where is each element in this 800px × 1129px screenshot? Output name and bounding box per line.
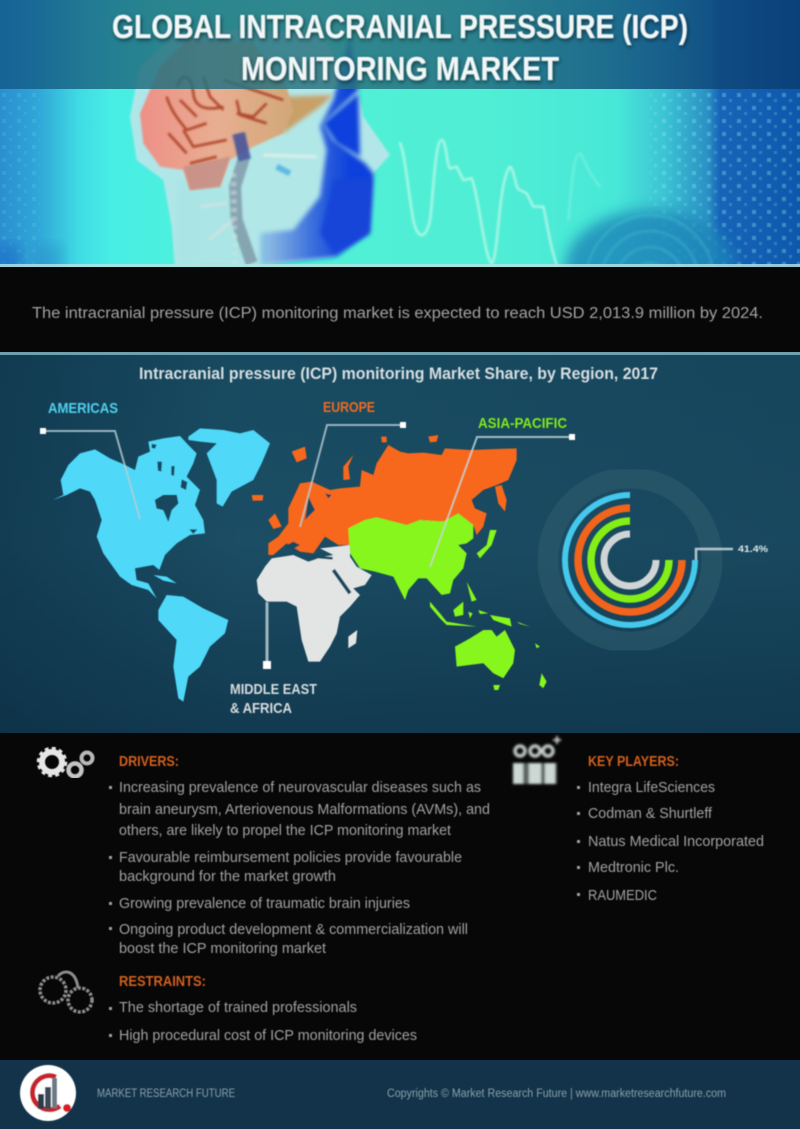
callout: Asia-Pacific <box>430 415 575 567</box>
list: drivers <box>109 780 490 957</box>
icon: gears <box>38 748 92 776</box>
panel: market share by region <box>0 352 800 733</box>
list: drivers: Increasing prevalence of neurovascular diseases such as <box>119 780 481 796</box>
callout: Europe: EUROPE <box>323 399 375 416</box>
footer <box>0 1060 800 1129</box>
footer brand text: MARKET RESEARCH FUTURE <box>97 1088 235 1100</box>
icon: key players people <box>513 736 561 784</box>
region: Europe and Russia <box>252 435 517 555</box>
list: key players: RAUMEDIC <box>588 888 657 904</box>
heading: key players: KEY PLAYERS: <box>588 754 679 770</box>
title: MONITORING MARKET <box>241 50 559 87</box>
callout: Middle East and Africa: & AFRICA <box>230 700 292 717</box>
hero banner with head illustration <box>0 0 800 355</box>
heading: restraints: RESTRAINTS: <box>119 974 206 990</box>
brain <box>140 40 333 190</box>
icon: fingerprint pattern <box>565 210 735 355</box>
callout: Americas <box>40 400 140 519</box>
list: restraints: High procedural cost of ICP monitoring devices <box>119 1028 417 1044</box>
spine <box>200 133 317 263</box>
list: restraints <box>109 1000 417 1044</box>
world map <box>53 428 547 702</box>
list: restraints: The shortage of trained professionals <box>119 1000 357 1016</box>
panel: summary band <box>0 267 800 352</box>
heading: drivers: DRIVERS: <box>119 754 179 770</box>
list: key players: Medtronic Plc. <box>588 860 679 876</box>
callout: 41.4%: 41.4% <box>738 544 769 555</box>
list: drivers: Favourable reimbursement policies provide favourable <box>119 850 462 866</box>
list: key players: Integra LifeSciences <box>588 780 715 796</box>
blue face shading <box>260 37 373 265</box>
region: Middle East and Africa <box>257 545 372 662</box>
list: key players <box>577 780 764 904</box>
list: key players: Natus Medical Incorporated <box>588 834 764 850</box>
summary text: The intracranial pressure (ICP) monitoring market is expected to reach USD 2,013.9 million by 2024. <box>32 305 763 322</box>
list: drivers: Ongoing product development & commercialization will <box>119 922 468 938</box>
top title band <box>0 0 800 89</box>
callout: Middle East and Africa <box>230 602 317 717</box>
callout: 41.4% <box>696 544 769 560</box>
region: Asia-Pacific <box>348 513 547 690</box>
callout: Middle East and Africa: MIDDLE EAST <box>230 681 317 698</box>
panel: drivers, restraints and key players <box>0 733 800 1060</box>
list: key players: Codman & Shurtleff <box>588 806 713 822</box>
list: drivers: Growing prevalence of traumatic brain injuries <box>119 896 410 912</box>
icon: head silhouette <box>130 30 390 265</box>
title: GLOBAL INTRACRANIAL PRESSURE (ICP) <box>112 8 688 45</box>
callout: Americas: AMERICAS <box>48 400 118 417</box>
region: Americas <box>53 428 270 702</box>
list: drivers: boost the ICP monitoring market <box>119 941 326 957</box>
icon: Market Research Future logo <box>20 1065 76 1121</box>
chart: concentric share rings <box>548 478 769 642</box>
list: drivers: others, are likely to propel the ICP monitoring market <box>119 823 451 839</box>
callout: Europe <box>300 399 406 527</box>
callout: Asia-Pacific: ASIA-PACIFIC <box>478 415 567 432</box>
list: drivers: brain aneurysm, Arteriovenous Malformations (AVMs), and <box>119 802 490 818</box>
list: drivers: background for the market growth <box>119 869 336 885</box>
footer copyright text: Copyrights © Market Research Future | www.marketresearchfuture.com <box>387 1088 726 1100</box>
icon: handcuffs <box>40 972 92 1012</box>
chart heading: Intracranial pressure (ICP) monitoring Market Share, by Region, 2017 <box>139 365 658 383</box>
chart: ECG wave <box>400 140 600 265</box>
title <box>112 8 688 87</box>
